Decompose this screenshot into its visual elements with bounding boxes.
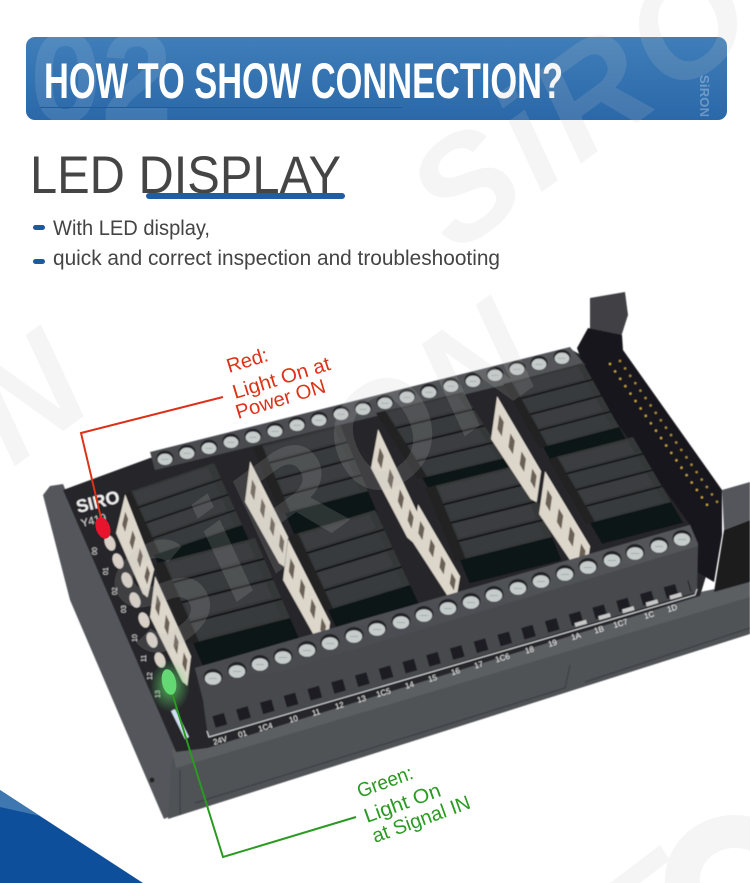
terminal labels: 14 bbox=[404, 679, 416, 691]
bullet text 1: With LED display, bbox=[53, 217, 210, 240]
side hole bbox=[150, 778, 154, 782]
led labels bbox=[92, 547, 162, 698]
terminal labels: 1D bbox=[666, 603, 679, 614]
red label: Light On at bbox=[230, 353, 333, 404]
board logo bbox=[74, 487, 122, 530]
relay board product bbox=[43, 292, 750, 819]
terminal slots bbox=[214, 586, 690, 722]
terminal labels: 1C7 bbox=[612, 617, 629, 630]
terminal labels: 1C6 bbox=[494, 651, 511, 664]
connector latch bbox=[590, 292, 628, 340]
relay group 6 bbox=[425, 464, 562, 585]
relay group 3 bbox=[253, 425, 377, 535]
jumper comb d bbox=[283, 540, 330, 663]
led labels: 03 bbox=[121, 605, 128, 613]
terminal labels: 10 bbox=[288, 713, 299, 725]
red leader line bbox=[81, 397, 223, 522]
top terminal block bbox=[150, 347, 585, 470]
connector pins bbox=[610, 361, 722, 512]
terminal labels: 16 bbox=[450, 666, 462, 677]
bullet dash 1 bbox=[33, 225, 45, 230]
led labels: 02 bbox=[112, 587, 119, 595]
jumper comb b bbox=[150, 577, 191, 697]
terminal labels: 1A bbox=[570, 631, 583, 642]
terminal labels: 1C bbox=[643, 609, 656, 621]
connector body bbox=[577, 328, 722, 582]
terminal screws bbox=[204, 530, 692, 685]
pale corner arc bbox=[610, 815, 750, 883]
relay group 4 bbox=[289, 510, 421, 635]
red led bbox=[93, 515, 113, 541]
green label bbox=[354, 762, 473, 848]
left wall bbox=[43, 484, 180, 819]
red label: Power ON bbox=[233, 376, 328, 424]
terminal labels: 18 bbox=[524, 644, 536, 656]
terminal labels: 12 bbox=[334, 700, 346, 711]
jumper comb c bbox=[245, 462, 288, 578]
front wall panel lines bbox=[180, 628, 750, 815]
front wall bbox=[168, 590, 750, 819]
bullet dash 2 bbox=[33, 259, 45, 264]
watermark: SiRON bbox=[73, 266, 572, 690]
terminal labels: 1C5 bbox=[375, 686, 392, 699]
sticker bbox=[171, 709, 189, 739]
terminal labels: 1C4 bbox=[257, 721, 274, 734]
green led bbox=[159, 668, 179, 696]
relay group 7 bbox=[503, 363, 631, 468]
terminal labels: 11 bbox=[311, 707, 322, 718]
green callout bbox=[159, 668, 473, 857]
green leader line bbox=[172, 693, 356, 857]
red callout bbox=[81, 344, 333, 541]
terminal labels: 01 bbox=[237, 728, 249, 740]
relay group 5 bbox=[376, 392, 518, 500]
corner triangle bbox=[0, 790, 143, 883]
banner number 02: 02 bbox=[30, 7, 172, 150]
led labels: 12 bbox=[147, 672, 154, 680]
led indicator column bbox=[102, 534, 168, 669]
jumper comb a bbox=[116, 495, 154, 608]
banner bbox=[26, 37, 727, 120]
led labels: 10 bbox=[132, 634, 139, 642]
relay group 1 bbox=[122, 463, 251, 576]
banner side logo: SiRON bbox=[697, 75, 712, 117]
jumper comb g bbox=[491, 397, 541, 514]
red label bbox=[224, 344, 333, 424]
relay group 2 bbox=[153, 538, 301, 670]
red label: Red: bbox=[224, 344, 271, 378]
green led glow bbox=[150, 660, 190, 712]
led labels: 00 bbox=[92, 547, 99, 555]
terminal labels: 17 bbox=[473, 659, 485, 671]
led labels: 11 bbox=[141, 655, 148, 662]
jumper comb e bbox=[371, 430, 418, 553]
terminal labels: 24V bbox=[212, 734, 229, 747]
jumper comb h bbox=[539, 472, 590, 589]
bullet text 2: quick and correct inspection and troubleshooting bbox=[53, 247, 500, 270]
jumper comb f bbox=[412, 505, 460, 613]
heading: LED DISPLAY: LED DISPLAY bbox=[30, 146, 341, 205]
terminal labels: 19 bbox=[547, 638, 559, 649]
green label: at Signal IN bbox=[369, 792, 473, 848]
terminal label line bbox=[207, 589, 697, 737]
terminal labels: 1B bbox=[593, 624, 605, 635]
led labels: 01 bbox=[103, 567, 110, 575]
bottom terminal block bbox=[195, 525, 698, 747]
led labels: 13 bbox=[155, 690, 162, 698]
terminal labels: 15 bbox=[427, 673, 439, 684]
relay group 8 bbox=[548, 437, 683, 545]
board logo: SIRO bbox=[74, 487, 122, 517]
terminal labels bbox=[212, 603, 679, 747]
right plug bbox=[722, 482, 750, 530]
heading underline bbox=[146, 193, 345, 199]
green label: Green: bbox=[354, 762, 416, 803]
green label: Light On bbox=[361, 780, 444, 828]
terminal labels: 13 bbox=[356, 694, 368, 705]
bullet list bbox=[33, 217, 500, 270]
circuit board surface bbox=[63, 350, 720, 752]
banner rule bbox=[40, 107, 402, 108]
board logo: Y419 bbox=[80, 512, 108, 530]
front wall top ledge bbox=[172, 582, 750, 768]
